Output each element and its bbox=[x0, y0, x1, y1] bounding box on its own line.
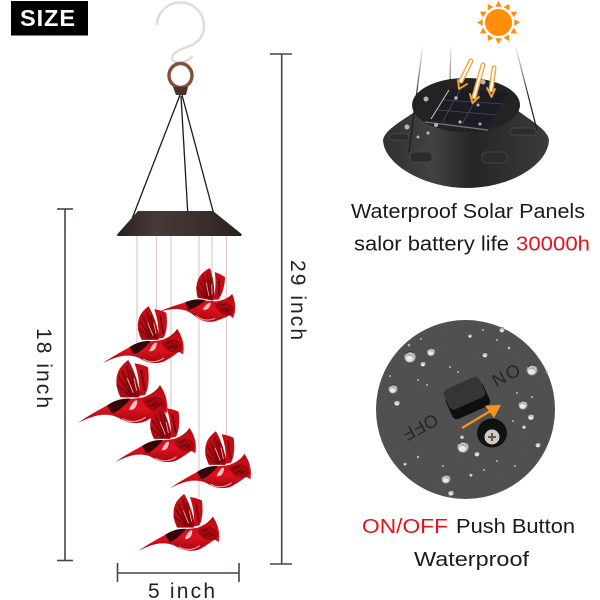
wind chime product bbox=[77, 2, 251, 551]
panel: on/off button photo bbox=[376, 320, 555, 499]
dimension: 18 inch: 18 inch bbox=[32, 328, 55, 408]
support wires bbox=[130, 95, 217, 226]
copper ring bbox=[169, 64, 192, 88]
solar panel caption: Waterproof Solar Panels bbox=[351, 200, 585, 223]
screw bbox=[477, 418, 507, 448]
on/off caption bbox=[362, 515, 575, 571]
solar panel caption: salor battery life bbox=[354, 232, 509, 256]
on/off caption: Push Button bbox=[456, 515, 575, 538]
cardinal 3 bbox=[77, 360, 167, 423]
solar panel bbox=[425, 89, 508, 130]
cardinal 1 bbox=[158, 260, 242, 327]
OFF label: OFF bbox=[399, 409, 442, 444]
lid wires bbox=[409, 44, 537, 152]
SIZE badge: SIZE bbox=[20, 5, 75, 31]
recessed panel well bbox=[412, 78, 520, 132]
ON label: ON bbox=[489, 359, 524, 391]
cardinal 2 bbox=[103, 306, 184, 363]
hanging strings bbox=[137, 236, 226, 498]
cardinal 4 bbox=[115, 405, 196, 462]
solar panel caption: 30000h bbox=[516, 232, 590, 256]
solar panel caption bbox=[351, 200, 590, 256]
tiny droplets bbox=[389, 329, 548, 471]
SIZE badge bbox=[11, 1, 88, 36]
dimension: 5 inch bbox=[118, 563, 239, 600]
lamp shade bbox=[117, 211, 242, 236]
cardinal 6 bbox=[138, 494, 219, 551]
lid droplets bbox=[404, 80, 486, 138]
ring collar bbox=[173, 87, 188, 95]
on/off caption: Waterproof bbox=[414, 548, 529, 571]
lid feet bbox=[389, 128, 536, 163]
cardinal 5 bbox=[170, 431, 251, 488]
lid disc bbox=[376, 320, 555, 499]
dimension: 29 inch: 29 inch bbox=[286, 260, 309, 340]
rocker button bbox=[441, 375, 492, 421]
water droplets bbox=[388, 327, 541, 496]
panel: solar lid photo bbox=[383, 1, 549, 188]
arrow: press direction bbox=[462, 405, 501, 428]
S hook bbox=[157, 2, 204, 63]
sunlight arrows bbox=[458, 61, 495, 103]
on/off caption: ON/OFF bbox=[362, 515, 448, 538]
icon: sun bbox=[477, 1, 520, 44]
solar lid dome bbox=[383, 80, 549, 188]
